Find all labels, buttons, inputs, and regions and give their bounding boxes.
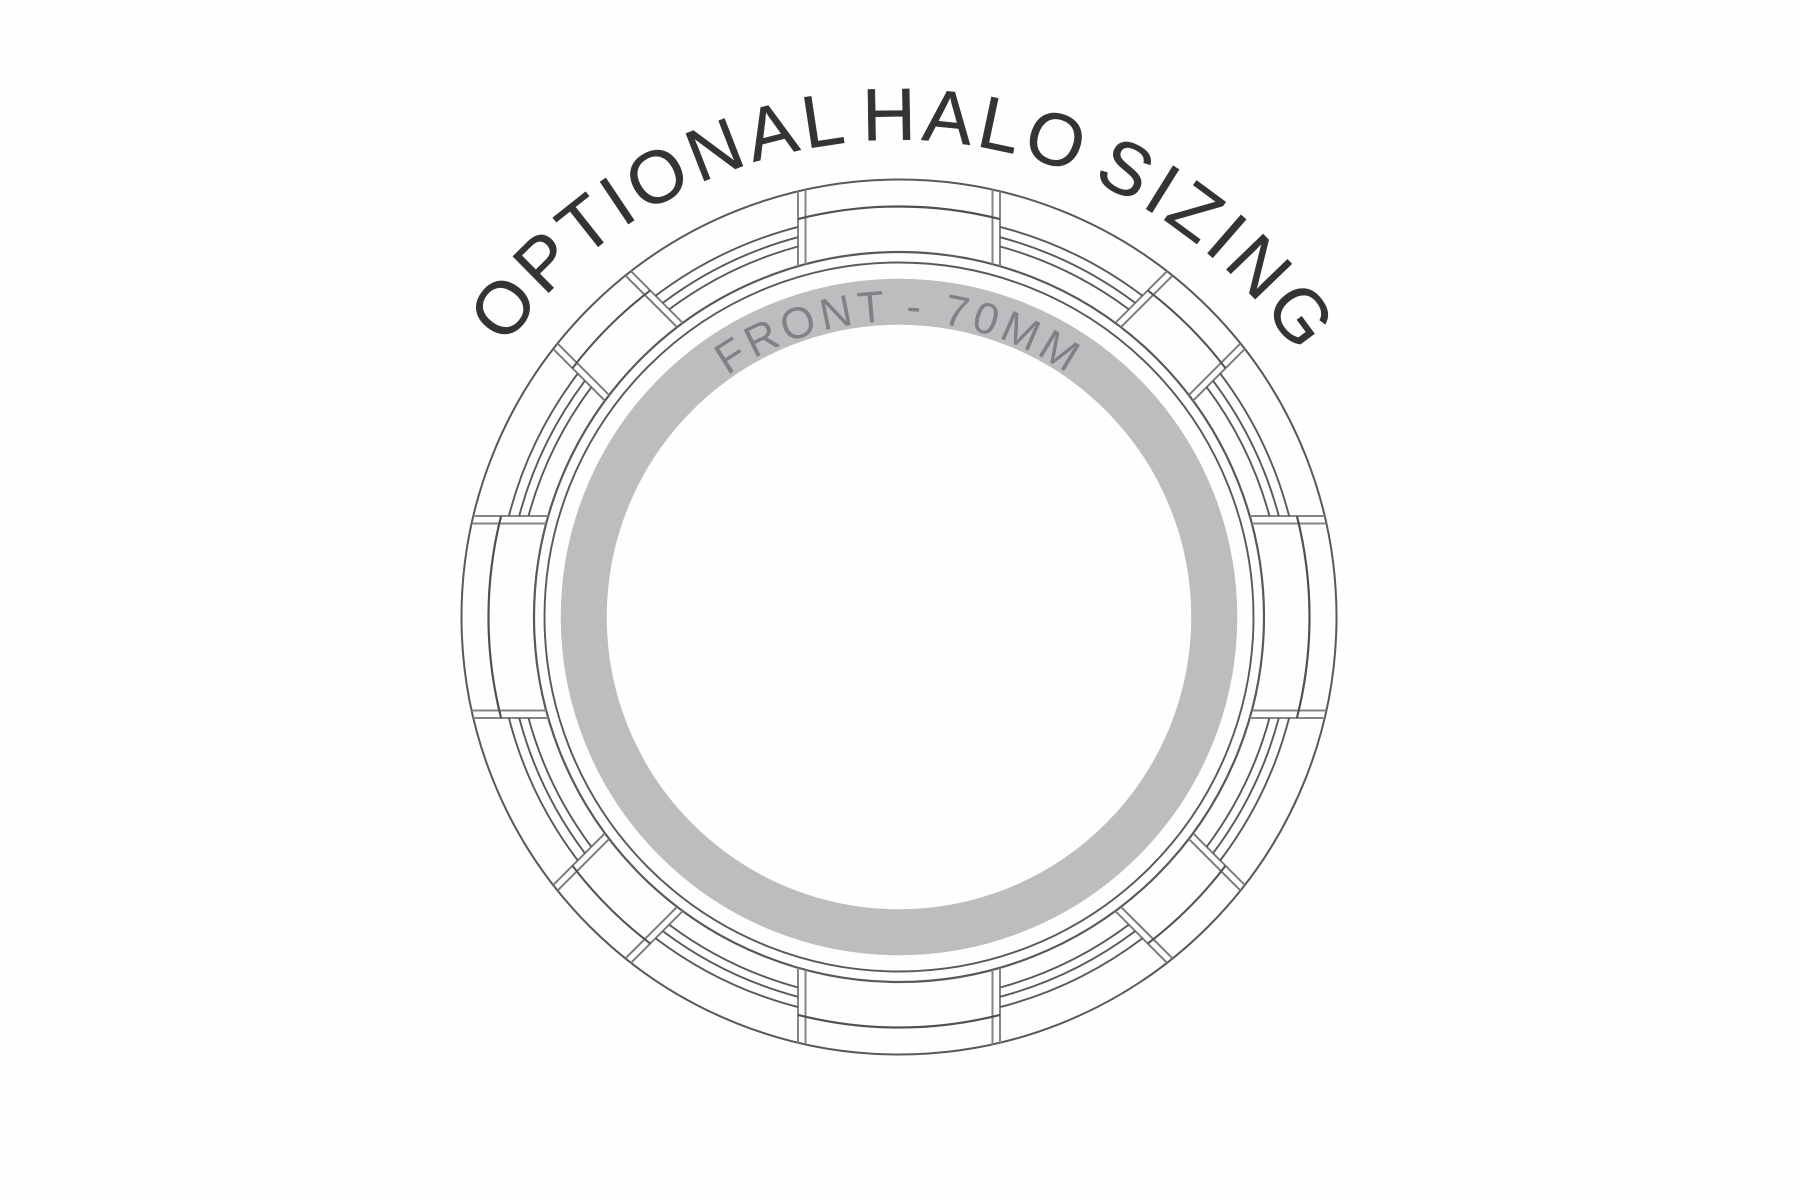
title: optional halo sizing: OPTIONAL HALO SIZING (476, 88, 1328, 344)
ring label: front 70mm: FRONT - 70MM (714, 291, 1080, 374)
gray halo ring: front 70mm (584, 302, 1214, 932)
inner housing rings (534, 252, 1264, 982)
triple arc lines between blocks (509, 227, 1289, 1007)
eight housing blocks (472, 190, 1326, 1044)
halo ring diagram (462, 180, 1336, 1054)
outer housing outline (462, 180, 1336, 1054)
